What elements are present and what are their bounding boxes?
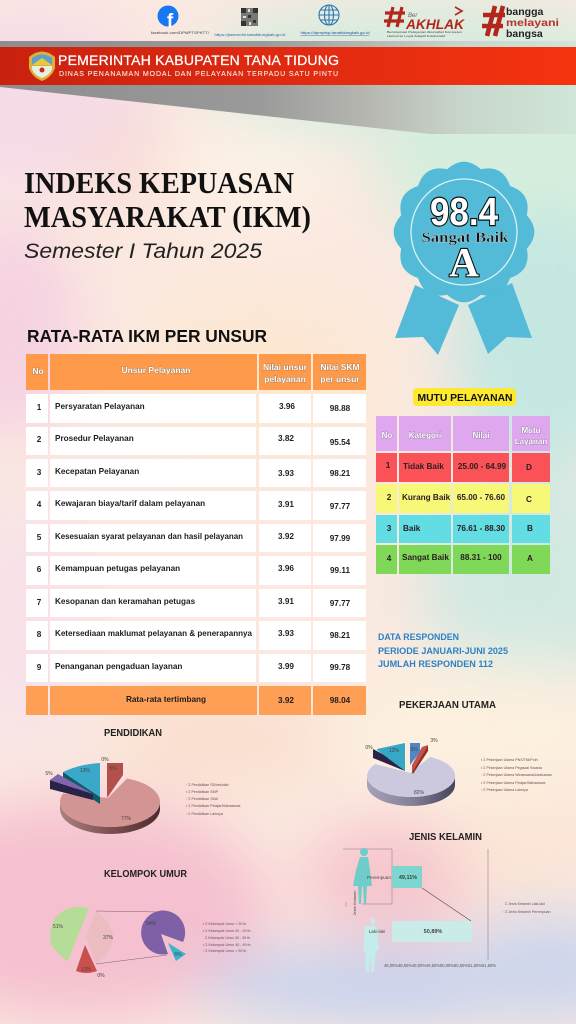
respondent data: DATA RESPONDEN [378, 632, 459, 643]
scale row 2 [376, 484, 550, 513]
header: social links and logos [151, 5, 559, 40]
legend: age group [203, 922, 250, 953]
heading: service quality: MUTU PELAYANAN [418, 392, 512, 404]
chart: gender bars [343, 848, 496, 972]
scale row 4 [376, 545, 550, 574]
chart: education pie: 5% [45, 771, 53, 777]
row 7: 3.91 [278, 597, 294, 606]
scale row 2: 2 [387, 493, 392, 502]
row 1: Persyaratan Pelayanan [55, 402, 145, 411]
icon: woman figure [353, 848, 372, 904]
heading: main occupation: PEKERJAAN UTAMA [399, 699, 496, 711]
scale row 3: 76.61 - 88.30 [457, 524, 506, 533]
gray wedge below banner [0, 85, 576, 134]
scale row 4: 88.31 - 100 [460, 553, 502, 562]
row 5 [26, 524, 366, 552]
chart: education pie: 77% [121, 816, 132, 822]
row 8: 8 [37, 630, 42, 639]
row 2 [26, 427, 366, 455]
legend: occupation: ▪ Σ Pekerjaan Utama Pegawai Swasta [481, 766, 542, 770]
logo: bangga melayani bangsa: melayani [506, 17, 559, 29]
scale row 4: Sangat Baik [402, 553, 449, 562]
legend: occupation: ▪ Σ Pekerjaan Utama Pelajar/Mahasiswa [481, 781, 545, 785]
scale header: Mutu [521, 426, 541, 435]
chart: education pie [45, 757, 160, 834]
chart: age group pie of pie [50, 907, 186, 979]
scale row 4: A [527, 554, 533, 563]
table: service quality scale [376, 416, 550, 574]
legend: age group: ▪ Σ Kelompok Umur 20 - 29 th [203, 929, 250, 933]
chart: gender bars: Laki-laki [369, 929, 385, 934]
logo: BerAKHLAK: Berorientasi Pelayanan Akuntabel Kompeten [387, 30, 463, 34]
icon: regency crest [29, 52, 55, 81]
row 9: 9 [37, 663, 42, 672]
legend: education: ▫ Σ Pendidikan Lainnya [186, 812, 223, 816]
scale row 1 [376, 453, 550, 482]
legend: education: ▪ Σ Pendidikan SMP [186, 790, 219, 794]
row 3: 98.21 [330, 469, 351, 478]
logo: bangga melayani bangsa: bangsa [506, 28, 543, 40]
row 3: 3 [37, 468, 42, 477]
logo: BerAKHLAK: Harmonis Loyal Adaptif Kolaboratif [387, 34, 445, 38]
title [24, 165, 311, 234]
total row: 98.04 [330, 696, 351, 705]
scale row 1: 1 [386, 461, 391, 470]
row 6: 6 [37, 565, 42, 574]
legend: education: ◦ Σ Pendidikan SMA [186, 797, 219, 801]
total row: Rata-rata tertimbang [126, 695, 206, 704]
banner [0, 47, 576, 85]
logo: BerAKHLAK: AKHLAK [405, 16, 465, 32]
row 3: 3.93 [278, 469, 294, 478]
chart: age group pie of pie: 6% [174, 952, 182, 958]
logo: bangga melayani bangsa: bangga [506, 6, 543, 18]
row 2: 2 [37, 435, 42, 444]
total row [26, 686, 366, 715]
chart: gender bars: 48,00%48,50%49,00%49,50%50,00%50,50%51,00%51,50% [384, 963, 496, 968]
table header: Unsur Pelayanan [122, 365, 190, 375]
scale header: No [382, 431, 392, 440]
row 4: 4 [37, 500, 42, 509]
scale header: Layanan [515, 437, 547, 446]
row 3 [26, 459, 366, 487]
legend: education [186, 783, 240, 816]
row 1 [26, 394, 366, 423]
row 5: 97.99 [330, 534, 351, 543]
title: INDEKS KEPUASAN [24, 165, 294, 200]
row 9: 3.99 [278, 662, 294, 671]
row 4 [26, 491, 366, 520]
row 2: 3.82 [278, 434, 294, 443]
row 6: 99.11 [330, 566, 350, 575]
score: 98.4 [430, 191, 498, 234]
legend: occupation: ◦ Σ Pekerjaan Utama Wiraswasta/Usahawan [481, 773, 552, 777]
row 2: Prosedur Pelayanan [55, 434, 134, 443]
row 6: 3.96 [278, 564, 294, 573]
chart: education pie: 13% [80, 768, 91, 774]
row 8 [26, 621, 366, 650]
scale row 2: 65.00 - 76.60 [457, 493, 506, 502]
row 2: 95.54 [330, 438, 351, 447]
row 3: Kecepatan Pelayanan [55, 467, 139, 476]
legend: gender [503, 902, 550, 914]
subtitle: Semester I Tahun 2025 [24, 240, 262, 263]
scale row 2: C [526, 495, 532, 504]
total row: 3.92 [278, 696, 294, 705]
table header: per unsur [320, 374, 360, 384]
title: MASYARAKAT (IKM) [24, 199, 311, 234]
row 6: Kemampuan petugas pelayanan [55, 564, 180, 573]
rating: Sangat Baik [422, 230, 509, 246]
chart: education pie: 0% [101, 757, 109, 763]
chart: age group pie of pie: 37% [103, 935, 114, 941]
scale row 2: Kurang Baik [402, 493, 451, 502]
legend: education: ▪ Σ Pendidikan Pelajar/Mahasiswa [186, 804, 240, 808]
row 7: Kesopanan dan keramahan petugas [55, 597, 196, 606]
heading: age group: KELOMPOK UMUR [104, 868, 187, 880]
table header: No [32, 366, 44, 376]
logo: BerAKHLAK [384, 7, 465, 38]
row 4: 3.91 [278, 500, 294, 509]
banner subtitle: DINAS PENANAMAN MODAL DAN PELAYANAN TERPADU SATU PINTU [59, 71, 338, 78]
legend: age group: ▫ Σ Kelompok Umur > 50 th [203, 949, 246, 953]
row 8: 98.21 [330, 631, 351, 640]
chart: gender bars: 49,11% [399, 875, 417, 881]
chart: gender bars: Perempuan [367, 875, 391, 880]
chart: occupation pie: 0% [365, 745, 373, 751]
banner title: PEMERINTAH KABUPATEN TANA TIDUNG [58, 52, 339, 68]
website address: https://dpmptsp.tanatidungkab.go.id [300, 31, 370, 35]
legend: gender: ▫ Σ Jenis Kelamin Perempuan [503, 910, 550, 914]
row 8: 3.93 [278, 629, 294, 638]
heading: service quality [413, 388, 516, 406]
row 7: 97.77 [330, 599, 351, 608]
row 1: 98.88 [330, 404, 351, 413]
legend: occupation: ▪ Σ Pekerjaan Utama PNS/TNI/Polri [481, 758, 538, 762]
row 4: Kewajaran biaya/tarif dalam pelayanan [55, 499, 205, 508]
row 9: 99.78 [330, 663, 351, 672]
chart: occupation pie: 3% [410, 747, 418, 753]
scalloped seal [394, 162, 534, 302]
gray band above banner [0, 41, 576, 47]
scale header [376, 416, 550, 451]
row 6 [26, 556, 366, 585]
row 8: Ketersediaan maklumat pelayanan & penerapannya [55, 629, 252, 638]
scale row 3: Baik [403, 524, 421, 533]
chart: occupation pie: 12% [389, 748, 400, 754]
row 1: 3.96 [279, 402, 295, 411]
table header: Nilai SKM [320, 362, 360, 372]
row 4: 97.77 [330, 502, 351, 511]
scale row 3 [376, 515, 550, 543]
scale header: Nilai [473, 431, 489, 440]
chart: age group pie of pie: 94% [146, 921, 157, 927]
scale row 1: 25.00 - 64.99 [458, 462, 507, 471]
row 5: Kesesuaian syarat pelayanan dan hasil pelayanan [55, 532, 243, 541]
chart: age group pie of pie: 0% [97, 973, 105, 979]
row 9: Penanganan pengaduan layanan [55, 662, 182, 671]
facebook address: facebook.com/DPMPTSPKTT/ [151, 30, 210, 35]
icon: QR code [241, 8, 258, 26]
chart: occupation pie: 3% [430, 738, 438, 744]
ribbon tails [395, 283, 532, 355]
scale row 4: 4 [387, 554, 392, 563]
icon: man figure [363, 917, 379, 972]
chart: occupation pie: 82% [414, 790, 425, 796]
grade: A [449, 239, 479, 285]
legend: occupation: ▫ Σ Pekerjaan Utama Lainnya [481, 788, 528, 792]
respondent data: JUMLAH RESPONDEN 112 [378, 659, 493, 670]
icon: facebook: f [167, 11, 174, 32]
icon: globe [319, 5, 339, 25]
chart: education pie: 5% [109, 766, 117, 772]
scale row 3: 3 [387, 524, 392, 533]
legend: age group: ▪ Σ Kelompok Umur < 20 th [203, 922, 246, 926]
legend: age group: ▪ Σ Kelompok Umur 40 - 49 th [203, 943, 250, 947]
legend: age group: Σ Kelompok Umur 30 - 39 th [205, 936, 250, 940]
scale row 3: B [527, 524, 533, 533]
chart: occupation pie [365, 738, 455, 806]
chart: gender bars: 50,89% [424, 929, 442, 935]
scale row 1: D [526, 463, 532, 472]
legend: gender: Σ Jenis Kelamin Laki-laki [505, 902, 545, 906]
heading: education: PENDIDIKAN [104, 727, 162, 739]
legend: occupation [481, 758, 552, 792]
row 9 [26, 654, 366, 682]
legend: education: ◦ Σ Pendidikan SD/sekolah [186, 783, 229, 787]
table: IKM per element [26, 354, 366, 715]
table header: pelayanan [264, 374, 306, 384]
table header [26, 354, 366, 390]
chart: age group pie of pie: 51% [53, 924, 64, 930]
badge: score rosette [394, 162, 534, 355]
respondent data [378, 632, 509, 670]
table header: Nilai unsur [263, 362, 308, 372]
chart: age group pie of pie: 12% [81, 967, 92, 973]
row 5: 3.92 [278, 532, 294, 541]
logo: BerAKHLAK: Ber [408, 13, 418, 19]
heading: average per element: RATA-RATA IKM PER UNSUR [27, 326, 267, 346]
chart: gender bars: Jenis Kelamin [352, 891, 357, 915]
row 5: 5 [37, 533, 42, 542]
respondent data: PERIODE JANUARI-JUNI 2025 [378, 646, 509, 657]
icon: facebook [158, 6, 178, 32]
QR address: https://jsesmohil.tanatidungkab.go.id [214, 33, 286, 37]
scale header: Kategori [409, 431, 441, 440]
row 7 [26, 589, 366, 617]
logo: bangga melayani bangsa [482, 6, 559, 40]
heading: gender: JENIS KELAMIN [409, 831, 482, 843]
row 1: 1 [37, 403, 42, 412]
row 7: 7 [37, 598, 42, 607]
scale row 1: Tidak Baik [403, 462, 444, 471]
